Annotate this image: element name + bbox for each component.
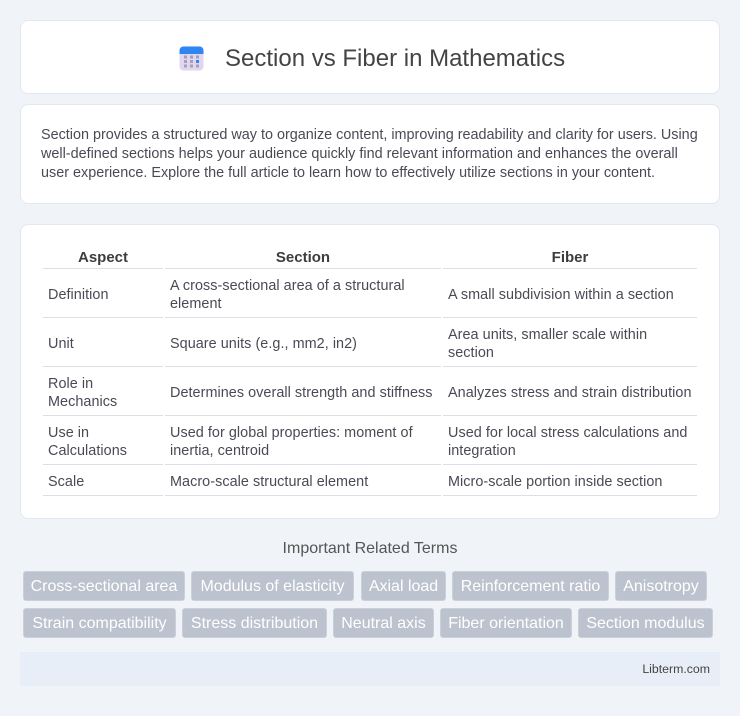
icon: calendar	[180, 46, 204, 70]
row: role in mechanics: Mechanics	[48, 394, 117, 410]
related term tags: Fiber orientation	[448, 615, 564, 632]
row: scale: Micro-scale portion inside section	[448, 474, 662, 490]
row: unit: Unit	[48, 336, 74, 352]
table header	[78, 249, 588, 266]
header card	[20, 20, 720, 94]
row: scale	[48, 474, 662, 490]
row: unit: Area units, smaller scale within	[448, 327, 647, 343]
row: role in mechanics: Determines overall strength and stiffness	[170, 385, 433, 401]
related term tags: Section modulus	[586, 615, 705, 632]
related term tags: Axial load	[369, 578, 438, 595]
intro text: Section provides a structured way to organize content, improving readability and clarity for users. Using	[41, 127, 698, 143]
row: use in calculations: inertia, centroid	[170, 443, 269, 459]
intro text	[41, 127, 698, 181]
row: definition: A cross-sectional area of a structural	[170, 278, 405, 294]
related term tags: Anisotropy	[623, 578, 699, 595]
row: scale: Macro-scale structural element	[170, 474, 368, 490]
related term tags	[23, 571, 713, 638]
related terms heading: Important Related Terms	[283, 540, 457, 557]
related term tags: Reinforcement ratio	[461, 578, 600, 595]
comparison table	[43, 249, 697, 496]
row: scale: Scale	[48, 474, 84, 490]
table header: Aspect	[78, 249, 128, 266]
row: use in calculations: integration	[448, 443, 516, 459]
row: use in calculations: Used for global properties: moment of	[170, 425, 413, 441]
row: role in mechanics	[48, 376, 692, 410]
row: use in calculations: Used for local stress calculations and	[448, 425, 687, 441]
row: use in calculations	[48, 425, 687, 459]
row: definition: element	[170, 296, 222, 312]
table header: Fiber	[552, 249, 588, 266]
intro card	[20, 104, 720, 204]
related term tags: Stress distribution	[191, 615, 318, 632]
table header: Section	[276, 249, 330, 266]
related term tags: Strain compatibility	[32, 615, 167, 632]
row: unit: section	[448, 345, 494, 361]
related term tags: Neutral axis	[341, 615, 426, 632]
intro text: user experience. Explore the full article to learn how to effectively utilize sections in your content.	[41, 165, 655, 181]
row: use in calculations: Calculations	[48, 443, 127, 459]
row: definition: A small subdivision within a section	[448, 287, 674, 303]
intro text: well-defined sections helps your audience quickly find relevant information and enhances the overall	[41, 146, 678, 162]
footer credit: Libterm.com	[642, 662, 710, 676]
row: unit	[48, 327, 647, 361]
row: role in mechanics: Role in	[48, 376, 93, 392]
title: Section vs Fiber in Mathematics	[225, 45, 565, 72]
row: role in mechanics: Analyzes stress and strain distribution	[448, 385, 692, 401]
footer	[20, 652, 720, 686]
row: use in calculations: Use in	[48, 425, 89, 441]
comparison table card	[20, 224, 720, 519]
related term tags: Cross-sectional area	[31, 578, 177, 595]
related term tags: Modulus of elasticity	[200, 578, 345, 595]
row: definition	[48, 278, 674, 312]
row: unit: Square units (e.g., mm2, in2)	[170, 336, 357, 352]
row: definition: Definition	[48, 287, 108, 303]
